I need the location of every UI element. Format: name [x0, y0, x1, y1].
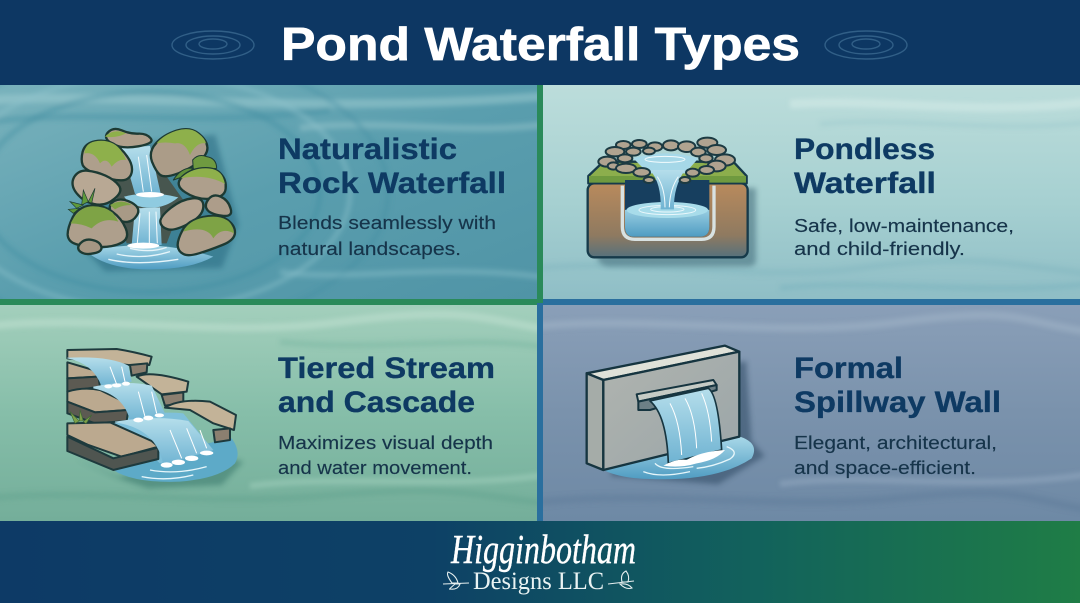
upper fall [122, 146, 161, 194]
panel: tiered stream and cascade: and Cascade [278, 386, 475, 419]
icon: right leaf sprig [608, 571, 634, 588]
panel: pondless waterfall [540, 85, 1080, 299]
description: naturalistic: Blends seamlessly with [278, 212, 496, 233]
panel: formal spillway wall: Spillway Wall [794, 386, 1001, 419]
icon: pondless waterfall [588, 138, 756, 266]
logo: Higginbotham Designs LLC: Designs LLC [473, 568, 604, 595]
icon: tiered cascade [67, 349, 243, 488]
panel: formal spillway wall [540, 305, 1080, 521]
icon: spillway wall [587, 346, 765, 484]
description: pondless: Safe, low-maintenance, [794, 215, 1014, 236]
heading: naturalistic rock waterfall: Naturalistic [278, 133, 457, 166]
panel: pondless waterfall: and child-friendly. [794, 238, 965, 259]
panel: tiered stream and cascade [0, 305, 550, 521]
panel: naturalistic rock waterfall [0, 85, 537, 299]
heading: tiered stream and cascade: Tiered Stream [278, 352, 495, 385]
logo: Higginbotham Designs LLC: Higginbotham [450, 526, 636, 572]
heading: formal spillway wall: Formal [794, 352, 903, 385]
description: tiered: Maximizes visual depth [278, 432, 493, 453]
backing shadow between rocks [117, 145, 183, 243]
divider: panel grid gutters [0, 85, 1080, 521]
panel: pondless waterfall: Waterfall [794, 167, 936, 200]
description: spillway: Elegant, architectural, [794, 432, 997, 453]
panel: footer band [0, 521, 1080, 603]
icon: rock waterfall [68, 129, 239, 271]
panel: naturalistic rock waterfall: Rock Waterfall [278, 167, 506, 200]
pool [87, 245, 213, 269]
logo: Higginbotham Designs LLC [443, 526, 636, 595]
icon: left water ripple [172, 31, 254, 59]
heading: pondless waterfall: Pondless [794, 133, 935, 166]
icon: left leaf sprig [443, 572, 469, 589]
title: Pond Waterfall Types [281, 18, 800, 70]
icon: right water ripple [825, 31, 907, 59]
panel: formal spillway wall: and space-efficient. [794, 457, 976, 478]
panel: naturalistic rock waterfall: natural landscapes. [278, 238, 461, 259]
panel: tiered stream and cascade: and water movement. [278, 457, 472, 478]
panel: header band [0, 0, 1080, 85]
